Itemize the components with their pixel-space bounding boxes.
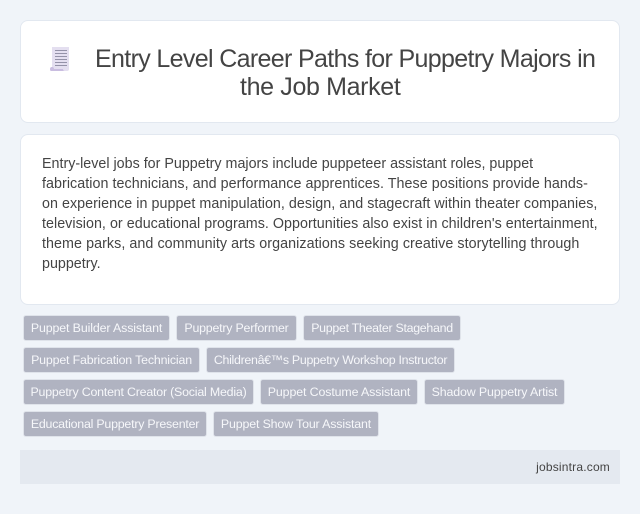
tag [23, 411, 207, 437]
tag: Childrenâ€™s Puppetry Workshop Instructor [214, 353, 447, 367]
panel: title card [20, 20, 620, 123]
description text: fabrication technicians, and performance apprentices. These positions provide hands- [42, 176, 588, 192]
tag [213, 411, 379, 437]
tag [424, 379, 565, 405]
footer bar [20, 450, 620, 484]
tag [206, 347, 455, 373]
description text: television, or educational programs. Opportunities also exist in children's entertainment, [42, 216, 598, 232]
tag [23, 315, 170, 341]
description text: puppetry. [42, 256, 101, 272]
tag: Puppet Fabrication Technician [31, 353, 192, 367]
description text: on experience in puppet manipulation, design, and stagecraft within theater companies, [42, 196, 597, 212]
icon: paper scroll [50, 47, 69, 71]
tag: Puppet Theater Stagehand [311, 321, 453, 335]
description text: theme parks, and community arts organizations seeking creative storytelling through [42, 236, 579, 252]
tag: Puppet Costume Assistant [268, 385, 410, 399]
tag: Puppetry Content Creator (Social Media) [30, 385, 247, 399]
tag: Shadow Puppetry Artist [432, 385, 557, 399]
tag: Educational Puppetry Presenter [31, 417, 199, 431]
description text [42, 156, 598, 272]
text: the Job Market [240, 73, 400, 101]
tag [23, 379, 254, 405]
text: Entry Level Career Paths for Puppetry Majors in [95, 45, 595, 73]
tag [260, 379, 418, 405]
tag: Puppet Builder Assistant [31, 321, 162, 335]
tag [176, 315, 297, 341]
title [95, 45, 595, 101]
tag [23, 347, 200, 373]
tag list [23, 315, 565, 437]
panel: description [20, 134, 620, 305]
description text: Entry-level jobs for Puppetry majors include puppeteer assistant roles, puppet [42, 156, 533, 172]
footer text: jobsintra.com [536, 460, 610, 474]
tag: Puppet Show Tour Assistant [221, 417, 371, 431]
tag: Puppetry Performer [184, 321, 289, 335]
tag [303, 315, 461, 341]
